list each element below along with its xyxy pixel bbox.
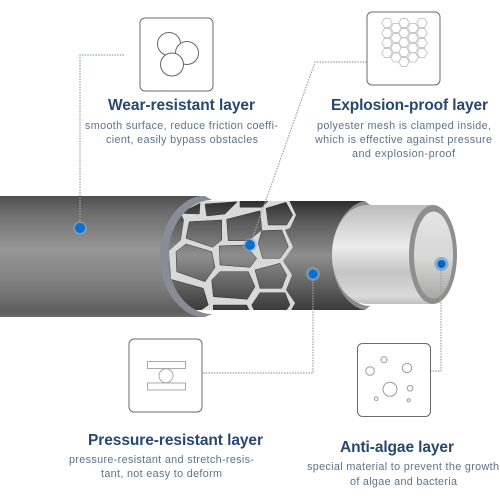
description: special material to prevent the growth xyxy=(307,461,499,473)
marker: wear-resistant xyxy=(73,221,87,235)
description: cient, easily bypass obstacles xyxy=(106,134,259,146)
outer wear layer xyxy=(0,196,212,317)
description: polyester mesh is clamped inside, xyxy=(317,120,491,132)
leader line: wear-resistant xyxy=(80,55,124,228)
description: pressure-resistant and stretch-resis- xyxy=(69,454,254,466)
icon: hexagon mesh xyxy=(367,12,440,85)
icon: overlapping circles xyxy=(140,18,213,91)
panel: explosion-proof layer xyxy=(314,12,492,160)
polyester mesh layer xyxy=(150,198,370,312)
panel: anti-algae layer xyxy=(307,344,499,488)
description xyxy=(69,454,254,480)
description: and explosion-proof xyxy=(352,148,456,160)
description: which is effective against pressure xyxy=(314,134,492,146)
description: smooth surface, reduce friction coeffi- xyxy=(85,120,278,132)
inner tube layer xyxy=(332,205,457,304)
description: of algae and bacteria xyxy=(350,476,457,488)
description xyxy=(307,461,499,488)
leader line: anti-algae xyxy=(430,264,441,371)
icon: circle between two plates xyxy=(129,339,202,412)
leader line: explosion-proof xyxy=(250,62,367,245)
description xyxy=(314,120,492,160)
marker: pressure-resistant xyxy=(306,267,320,281)
heading: Pressure-resistant layer xyxy=(88,432,263,449)
heading: Wear-resistant layer xyxy=(108,97,255,114)
description xyxy=(85,120,278,146)
panel: pressure-resistant layer xyxy=(69,339,263,480)
marker: anti-algae xyxy=(434,257,448,271)
heading: Explosion-proof layer xyxy=(331,97,488,114)
description: tant, not easy to deform xyxy=(101,468,222,480)
leader line: pressure-resistant xyxy=(203,274,313,373)
marker: explosion-proof xyxy=(243,238,257,252)
panel: wear-resistant layer xyxy=(85,18,278,146)
heading: Anti-algae layer xyxy=(340,439,454,456)
icon: scattered bubbles xyxy=(358,344,430,416)
hose illustration xyxy=(0,196,457,317)
